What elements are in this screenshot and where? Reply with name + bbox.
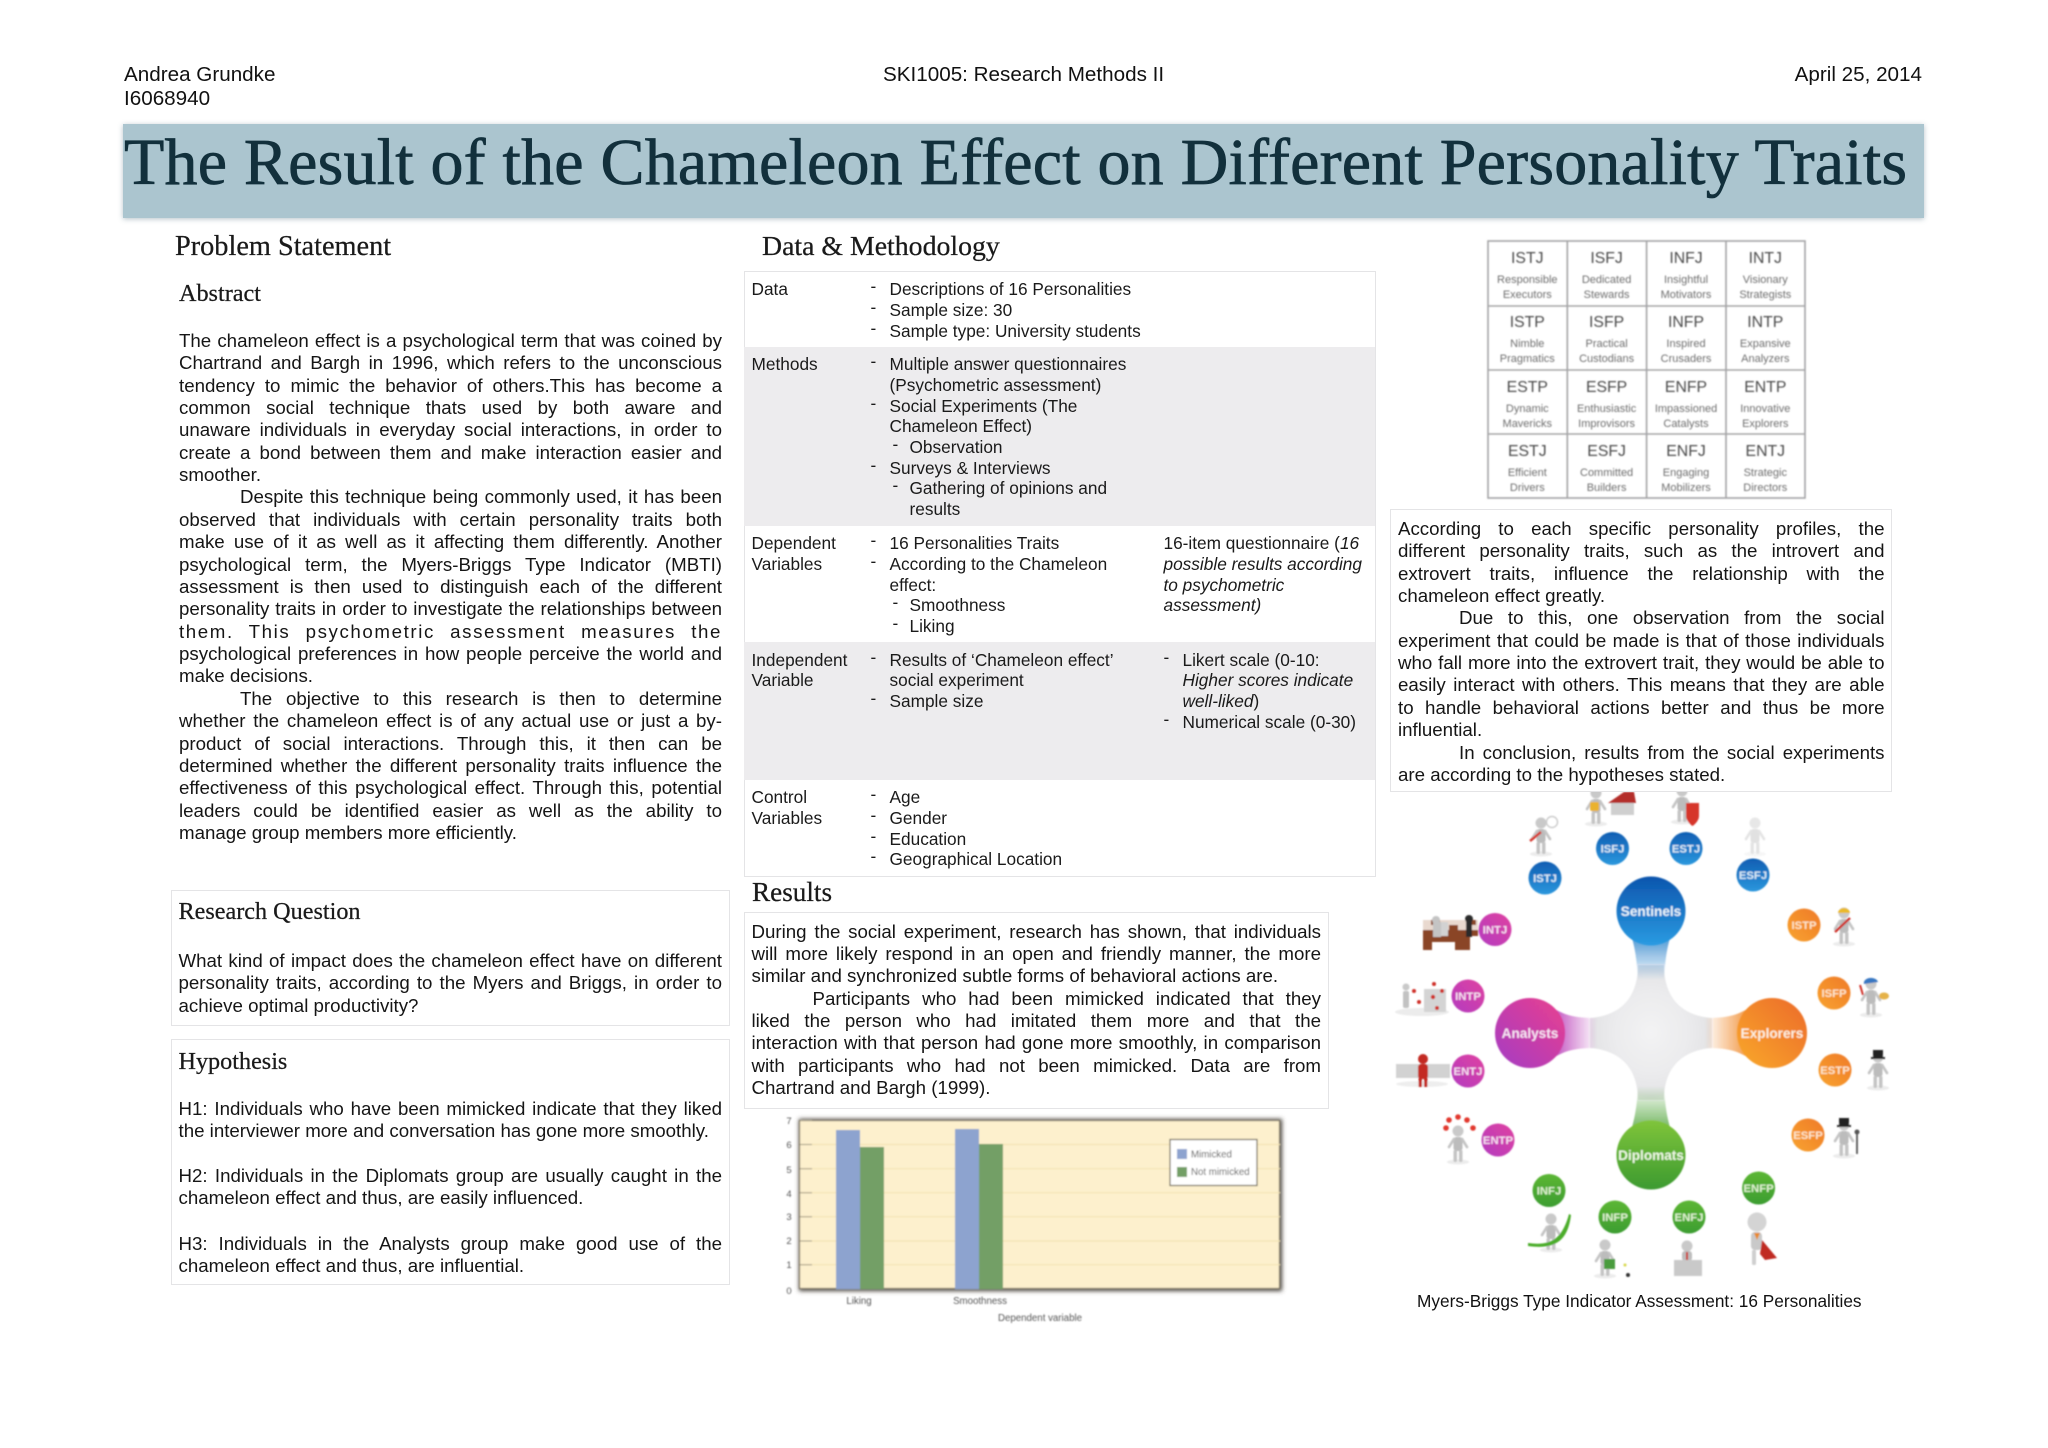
y axis labels: 6 — [786, 1140, 792, 1151]
row list: Smoothness — [910, 595, 1005, 615]
table row: control variables — [752, 784, 1062, 869]
type descriptions: Explorers — [1742, 418, 1789, 430]
row list: Sample size: 30 — [890, 300, 1012, 320]
type descriptions: Strategists — [1739, 289, 1792, 301]
text: conclusion: experiment that could be made is that of those individuals — [1398, 630, 1884, 651]
type descriptions: Engaging — [1663, 467, 1709, 479]
y axis labels: 0 — [786, 1286, 792, 1297]
text: conclusion: to handle behavioral actions better and thus be more — [1398, 697, 1884, 718]
group: analysts — [1495, 998, 1597, 1068]
caption: mind map: Myers-Briggs Type Indicator Assessment: 16 Personalities — [1417, 1291, 1862, 1311]
analyst type badges: INTP — [1455, 991, 1481, 1003]
author name and id: I6068940 — [124, 87, 210, 110]
group: sentinels: Sentinels — [1621, 904, 1681, 919]
group: sentinels — [1616, 876, 1686, 980]
type codes: ENTP — [1744, 379, 1786, 396]
text: results — [752, 920, 1321, 1098]
type codes: ISTJ — [1511, 250, 1544, 267]
group: diplomats — [1616, 1086, 1686, 1190]
text block: abstract: The objective to this research is then to determine — [240, 688, 722, 709]
type descriptions: Committed — [1580, 467, 1633, 479]
text block: abstract: tendency to mimic the behavior of others.This has become a — [179, 375, 722, 396]
type codes: INFP — [1668, 314, 1704, 331]
icon: INTJ chess figure — [1423, 915, 1478, 950]
row list: Social Experiments (The — [890, 396, 1077, 416]
group: explorers — [1705, 998, 1807, 1068]
row list: Gathering of opinions and — [910, 478, 1107, 498]
panel: results text — [744, 912, 1329, 1109]
y axis labels: 7 — [786, 1116, 792, 1127]
author name and id — [124, 63, 275, 110]
text: research question: achieve optimal productivity? — [178, 995, 418, 1016]
type codes: ENFJ — [1666, 443, 1706, 460]
text block: abstract: Despite this technique being commonly used, it has been — [240, 486, 722, 507]
type codes: ENFP — [1665, 379, 1707, 396]
type descriptions: Responsible — [1497, 274, 1558, 286]
measurement note: - — [1164, 647, 1169, 667]
text block: abstract: observed that individuals with certain personality traits both — [179, 509, 722, 530]
table row: dependent variables — [752, 530, 1362, 636]
text: conclusion: extrovert traits, influence the relationship with the — [1398, 563, 1884, 584]
heading: data and methodology: Data & Methodology — [762, 231, 1000, 262]
heading: hypothesis: Hypothesis — [178, 1048, 287, 1075]
explorer type badges: ESTP — [1820, 1065, 1850, 1077]
x axis labels — [846, 1296, 1082, 1324]
grid: 16 personality types — [1486, 239, 1807, 500]
title: The Result of the Chameleon Effect on Different Personality Traits — [124, 126, 1907, 199]
sentinel type badges — [1528, 832, 1770, 894]
plot frame — [799, 1119, 1282, 1291]
row list: (Psychometric assessment) — [890, 375, 1101, 395]
y axis labels — [786, 1116, 792, 1297]
y axis labels: 1 — [786, 1260, 792, 1271]
measurement note: to psychometric — [1164, 575, 1284, 595]
measurement note: Higher scores indicate — [1182, 670, 1353, 690]
y axis labels: 2 — [786, 1236, 792, 1247]
row label: Variables — [752, 808, 822, 828]
table row: data — [752, 276, 1141, 341]
type codes: ESFP — [1586, 379, 1627, 396]
panel: hypothesis — [171, 1039, 730, 1284]
mind map: four groups and 16 personalities — [1396, 792, 1890, 1278]
text block: abstract: assessment is then used to distinguish each of the different — [179, 576, 722, 597]
table row: independent variable — [744, 642, 1374, 780]
type descriptions: Efficient — [1508, 467, 1547, 479]
text block: abstract: The chameleon effect is a psychological term that was coined by — [179, 330, 722, 351]
text block: abstract: Chartrand and Bargh in 1996, which refers to the unconscious — [179, 352, 722, 373]
row list: - — [870, 351, 876, 371]
type descriptions: Insightful — [1664, 274, 1708, 286]
group: explorers: Explorers — [1741, 1026, 1803, 1041]
text block: abstract: psychological preferences in how people perceive the world and — [179, 643, 722, 664]
centre hub — [1590, 965, 1712, 1100]
text: conclusion — [1398, 518, 1884, 785]
measurement note: Numerical scale (0-30) — [1182, 712, 1356, 732]
text: conclusion: influential. — [1398, 719, 1482, 740]
text block: abstract: psychological term, the Myers-Briggs Type Indicator (MBTI) — [179, 554, 722, 575]
icon: ISTP hard-hat figure — [1833, 908, 1855, 946]
row list: social experiment — [890, 670, 1024, 690]
type codes: ISFJ — [1590, 250, 1623, 267]
type codes — [1507, 250, 1786, 460]
type descriptions: Dedicated — [1582, 274, 1631, 286]
type codes: INTJ — [1749, 250, 1782, 267]
text: hypothesis 3 — [178, 1232, 722, 1276]
text: research question: What kind of impact does the chameleon effect have on different — [178, 950, 722, 971]
row list: - — [870, 276, 876, 296]
text block: abstract: leaders could be identified easier as well as the ability to — [179, 800, 722, 821]
row label: Control — [752, 787, 807, 807]
text: conclusion: chameleon effect greatly. — [1398, 585, 1605, 606]
icon: ISFP painter figure — [1860, 978, 1889, 1018]
table row: methods — [744, 346, 1374, 526]
measurement note — [1163, 533, 1362, 615]
row list: Surveys & Interviews — [890, 458, 1051, 478]
type codes: ISTP — [1510, 314, 1545, 331]
text: results: interaction with that person had gone more smoothly, in comparison — [752, 1032, 1321, 1053]
legend — [1170, 1140, 1257, 1186]
icon: ENFJ podium figure — [1674, 1240, 1702, 1276]
type codes: INTP — [1747, 314, 1783, 331]
icon: ISFJ house figure — [1585, 788, 1636, 826]
heading: results: Results — [752, 877, 832, 907]
text block: abstract: manage group members more efficiently. — [179, 822, 517, 843]
type descriptions: Mavericks — [1503, 418, 1553, 430]
icon: ESTP top-hat figure — [1867, 1050, 1889, 1090]
analyst type badges: INTJ — [1483, 924, 1507, 936]
type descriptions: Strategic — [1744, 467, 1787, 479]
text block: abstract: make decisions. — [179, 665, 313, 686]
text: results: Chartrand and Bargh (1999). — [752, 1077, 990, 1098]
y axis labels: 3 — [786, 1212, 792, 1223]
measurement note — [1164, 647, 1356, 732]
row label: Variables — [752, 554, 822, 574]
text block: abstract: determined whether the different personality traits influence the — [179, 755, 722, 776]
text: conclusion: who fall more into the extrovert trait, they would be able to — [1398, 652, 1884, 673]
measurement note: 16-item questionnaire (16 — [1164, 533, 1359, 553]
row list: According to the Chameleon — [890, 554, 1107, 574]
analyst type badges — [1452, 913, 1514, 1156]
row list — [870, 530, 1107, 636]
row list: - — [870, 784, 876, 804]
text block: abstract: effectiveness of this psychological effect. Through this, potential — [179, 777, 722, 798]
text block: abstract — [179, 330, 722, 843]
row list — [870, 784, 1062, 869]
row label — [752, 787, 822, 828]
type descriptions: Pragmatics — [1500, 353, 1555, 365]
type descriptions: Builders — [1587, 482, 1627, 494]
bar chart: liking and smoothness by condition — [786, 1115, 1286, 1324]
row list: - — [892, 434, 898, 454]
heading: research question: Research Question — [178, 898, 361, 925]
type codes: ESFJ — [1587, 443, 1626, 460]
text: conclusion: According to each specific personality profiles, the — [1398, 518, 1884, 539]
text: hypothesis 2: H2: Individuals in the Diplomats group are usually caught in the — [178, 1165, 722, 1186]
legend: Not mimicked — [1191, 1167, 1250, 1178]
sentinel type badges: ESFJ — [1739, 870, 1767, 882]
icon: ENTP idea figure — [1443, 1114, 1476, 1164]
date: April 25, 2014 — [1795, 63, 1922, 86]
row list: - — [892, 475, 898, 495]
row label: Dependent — [752, 533, 836, 553]
analyst type badges: ENTP — [1483, 1135, 1514, 1147]
heading: problem statement: Problem Statement — [175, 231, 391, 262]
icon: INTP cube figure — [1395, 982, 1449, 1016]
row list: - — [892, 613, 898, 633]
type codes: INFJ — [1669, 250, 1703, 267]
author name and id: Andrea Grundke — [124, 63, 275, 86]
text block: abstract: product of social interactions. Through this, it then can be — [179, 733, 722, 754]
text block: abstract: them. This psychometric assessment measures the — [179, 621, 722, 642]
text: conclusion: different personality traits, such as the introvert and — [1398, 540, 1884, 561]
panel: research question — [171, 890, 730, 1026]
icon: INFP watering figure — [1594, 1240, 1630, 1278]
type codes: ENTJ — [1746, 443, 1785, 460]
row list: Liking — [910, 616, 955, 636]
bars: smoothness — [955, 1129, 1003, 1289]
row label: Methods — [752, 354, 818, 374]
diplomat type badges: ENFP — [1744, 1183, 1774, 1195]
icon: ISTJ magnifier figure — [1530, 816, 1558, 856]
row list: - — [870, 551, 876, 571]
row list: - — [870, 318, 876, 338]
type descriptions: Executors — [1503, 289, 1552, 301]
type descriptions: Practical — [1586, 338, 1628, 350]
gridlines — [800, 1144, 1280, 1265]
icon: ESTJ shield figure — [1671, 786, 1699, 826]
explorer type badges: ISFP — [1821, 988, 1847, 1000]
row list: Observation — [910, 437, 1003, 457]
row list: - — [870, 530, 876, 550]
measurement note: assessment) — [1164, 595, 1261, 615]
type descriptions — [1497, 274, 1792, 494]
sentinel type badges: ISFJ — [1601, 844, 1624, 856]
text: hypothesis 3: chameleon effect and thus, are influential. — [178, 1255, 524, 1276]
type descriptions: Stewards — [1584, 289, 1630, 301]
icon: ESFP singer figure — [1833, 1118, 1860, 1158]
row list: - — [870, 826, 876, 846]
text block: abstract: create a bond between them and make interaction easier and — [179, 442, 722, 463]
x axis labels: Dependent variable — [998, 1313, 1082, 1324]
text: conclusion: are according to the hypotheses stated. — [1398, 764, 1725, 785]
type descriptions: Dynamic — [1506, 403, 1549, 415]
type descriptions: Custodians — [1579, 353, 1635, 365]
row list: - — [870, 846, 876, 866]
row label: Data — [752, 279, 788, 299]
type descriptions: Impassioned — [1655, 403, 1717, 415]
axis ticks — [800, 1120, 812, 1265]
row list — [870, 647, 1114, 711]
diplomat type badges: ENFJ — [1675, 1212, 1703, 1224]
legend: Mimicked — [1191, 1150, 1232, 1160]
type descriptions: Mobilizers — [1661, 482, 1711, 494]
row list: Geographical Location — [890, 849, 1062, 869]
row list: Age — [890, 787, 920, 807]
sentinel type badges: ISTJ — [1533, 873, 1557, 885]
text: research question — [178, 950, 722, 1016]
row list: Results of ‘Chameleon effect’ — [890, 650, 1114, 670]
row list: Chameleon Effect) — [890, 416, 1032, 436]
type descriptions: Catalysts — [1663, 418, 1709, 430]
type descriptions: Crusaders — [1661, 353, 1712, 365]
icon: ENTJ red figure — [1396, 1054, 1450, 1087]
row list: effect: — [890, 575, 936, 595]
measurement note: - — [1164, 709, 1169, 729]
measurement note: well-liked) — [1182, 691, 1259, 711]
row list: results — [910, 499, 960, 519]
type descriptions: Directors — [1743, 482, 1788, 494]
x axis labels: Liking — [846, 1296, 872, 1307]
heading: abstract: Abstract — [179, 280, 261, 306]
icon: ESFJ light figure — [1744, 818, 1766, 856]
icon: ENFP superhero figure — [1748, 1212, 1777, 1265]
diplomat type badges: INFP — [1602, 1212, 1628, 1224]
row list: Multiple answer questionnaires — [890, 354, 1126, 374]
text block: abstract: whether the chameleon effect is of any actual use or just a by- — [179, 710, 722, 731]
text: results: Participants who had been mimicked indicated that they — [812, 988, 1321, 1009]
text block: abstract: make use of it as well as it affecting them differently. Another — [179, 531, 722, 552]
text block: abstract: personality traits in order to investigate the relationships between — [179, 598, 722, 619]
row list: 16 Personalities Traits — [890, 533, 1059, 553]
type codes: ESTJ — [1508, 443, 1547, 460]
type descriptions: Visionary — [1743, 274, 1788, 286]
explorer type badges: ESFP — [1793, 1130, 1823, 1142]
type descriptions: Inspired — [1666, 338, 1706, 350]
type descriptions: Drivers — [1510, 482, 1545, 494]
icon: INFJ growth arrow figure — [1528, 1214, 1571, 1252]
text: results: liked the person who had imitated them more and that the — [752, 1010, 1321, 1031]
row label — [752, 533, 836, 574]
text: hypothesis 2: chameleon effect and thus, are easily influenced. — [178, 1187, 583, 1208]
y axis labels: 5 — [786, 1165, 792, 1176]
diplomat type badges: INFJ — [1537, 1186, 1561, 1198]
row list: Gender — [890, 808, 947, 828]
text: hypothesis 1: H1: Individuals who have been mimicked indicate that they liked — [178, 1098, 722, 1119]
row list — [870, 351, 1126, 519]
grid lines — [1488, 241, 1805, 498]
row list — [870, 276, 1141, 341]
x axis labels: Smoothness — [953, 1296, 1007, 1307]
text: results: similar and synchronized subtle forms of behavioral actions are. — [752, 965, 1278, 986]
row list: Sample size — [890, 691, 983, 711]
row list: Sample type: University students — [890, 321, 1141, 341]
text: hypothesis 2 — [178, 1165, 722, 1208]
type descriptions: Nimble — [1510, 338, 1544, 350]
row list: - — [892, 592, 898, 612]
y axis labels: 4 — [786, 1189, 792, 1200]
text block: abstract: unaware individuals in everyday social interactions, in order to — [179, 419, 722, 440]
text: results: will more likely respond in an open and friendly manner, the more — [752, 943, 1321, 964]
group: analysts: Analysts — [1502, 1026, 1558, 1041]
group: diplomats: Diplomats — [1618, 1148, 1684, 1163]
text: research question: personality traits, according to the Myers and Briggs, in order to — [178, 972, 722, 993]
row list: - — [870, 393, 876, 413]
row label — [752, 650, 848, 690]
text: conclusion: In conclusion, results from the social experiments — [1459, 742, 1884, 763]
text: hypothesis 3: H3: Individuals in the Analysts group make good use of the — [178, 1232, 722, 1254]
diplomat type badges — [1532, 1172, 1775, 1234]
plot area — [800, 1120, 1280, 1288]
explorer type badges — [1788, 908, 1852, 1152]
measurement note: possible results according — [1164, 554, 1362, 574]
type codes: ESTP — [1507, 379, 1548, 396]
text: results: During the social experiment, research has shown, that individuals — [752, 920, 1321, 942]
analyst type badges: ENTJ — [1454, 1066, 1482, 1078]
row list: - — [870, 455, 876, 475]
table: data and methodology — [744, 271, 1376, 877]
type descriptions: Analyzers — [1741, 353, 1790, 365]
measurement note: Likert scale (0-10: — [1182, 650, 1320, 670]
type descriptions: Expansive — [1740, 338, 1791, 350]
text: hypothesis 1: the interviewer more and conversation has gone more smoothly. — [178, 1120, 709, 1141]
text block: abstract: common social technique thats used by both aware and — [179, 397, 722, 418]
bars: liking — [836, 1130, 884, 1289]
text: conclusion: Due to this, one observation from the social — [1459, 607, 1884, 628]
course name: SKI1005: Research Methods II — [883, 63, 1164, 86]
title banner — [123, 124, 1924, 218]
sentinel type badges: ESTJ — [1672, 844, 1700, 856]
row list: - — [870, 297, 876, 317]
text: results: with participants who had not been mimicked. Data are from — [752, 1055, 1321, 1076]
row label: Variable — [752, 670, 814, 690]
row list: - — [870, 647, 876, 667]
row list: - — [870, 688, 876, 708]
text block: abstract: smoother. — [179, 464, 261, 485]
text: hypothesis 1 — [178, 1098, 722, 1141]
row list: Descriptions of 16 Personalities — [890, 279, 1131, 299]
type descriptions: Innovative — [1740, 403, 1790, 415]
type descriptions: Motivators — [1661, 289, 1712, 301]
explorer type badges: ISTP — [1791, 920, 1817, 932]
row label: Independent — [752, 650, 847, 670]
type descriptions: Improvisors — [1578, 418, 1636, 430]
row list: Education — [890, 829, 966, 849]
panel: discussion and conclusion — [1390, 509, 1892, 792]
row list: - — [870, 805, 876, 825]
text: conclusion: easily interact with others. This means that they are able — [1398, 674, 1884, 695]
type descriptions: Enthusiastic — [1577, 403, 1637, 415]
type codes: ISFP — [1589, 314, 1624, 331]
